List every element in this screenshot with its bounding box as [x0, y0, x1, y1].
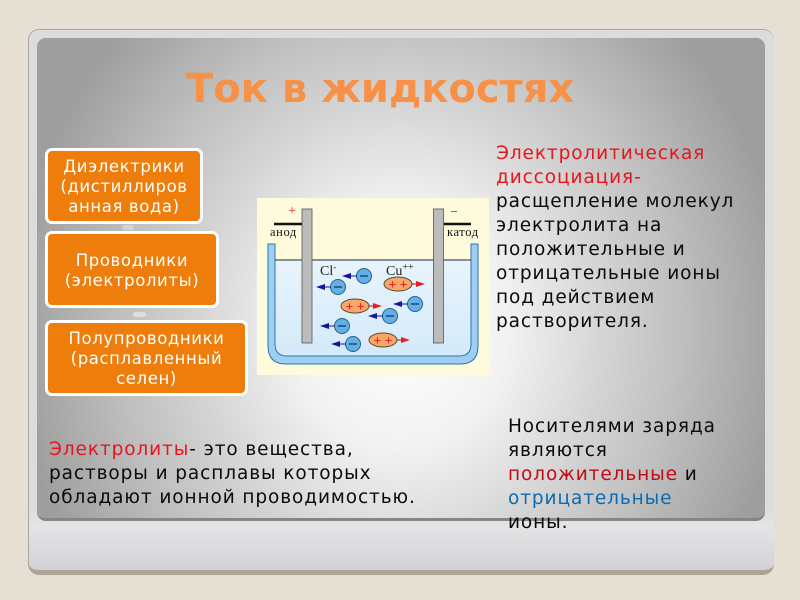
electrolysis diagram: анод [270, 225, 297, 239]
text: dissociation definition: расщепление молекул [496, 191, 734, 212]
box: conductors [45, 231, 219, 308]
box: dielectrics [45, 148, 203, 224]
electrolysis diagram [257, 198, 489, 375]
text: dissociation definition: Электролитическая [496, 143, 705, 164]
electrolysis diagram: + + [346, 298, 364, 314]
text: electrolytes definition [49, 439, 416, 508]
electrodes [302, 209, 312, 343]
text: charge carriers: положительные и [508, 464, 698, 485]
text: electrolytes definition: растворы и расплавы которых [49, 463, 371, 484]
positive ions [341, 277, 412, 347]
connector: second arrow [133, 312, 146, 317]
box: semiconductors: (расплавленный [71, 349, 222, 368]
electrolysis diagram: + + [374, 332, 392, 348]
text: dissociation definition: диссоциация- [496, 167, 642, 188]
electrolysis diagram: катод [447, 225, 479, 239]
title: Ток в жидкостях [186, 66, 574, 112]
box: dielectrics: (дистиллиров [60, 177, 188, 196]
text: charge carriers: Носителями заряда [508, 416, 716, 437]
text: electrolytes definition: обладают ионной проводимостью. [49, 487, 416, 508]
box: semiconductors: селен) [116, 369, 177, 388]
text: charge carriers: являются [508, 440, 608, 461]
text: dissociation definition: положительные и [496, 239, 686, 260]
electrolysis diagram: Cu [386, 264, 402, 279]
box: dielectrics: Диэлектрики [63, 157, 185, 176]
connector: first arrow [122, 225, 134, 230]
text: dissociation definition [496, 143, 734, 332]
text: dissociation definition: электролита на [496, 215, 662, 236]
electrolysis diagram: + [288, 204, 296, 219]
box: semiconductors: Полупроводники [68, 329, 224, 348]
text: charge carriers [508, 416, 716, 533]
main gradient panel [37, 38, 765, 521]
electrolysis diagram: - [333, 262, 336, 272]
text: charge carriers: отрицательные [508, 488, 672, 509]
electrolysis diagram: ++ [402, 262, 414, 273]
text: dissociation definition: растворителя. [496, 311, 649, 332]
water [275, 260, 471, 356]
box: conductors: (электролиты) [65, 270, 199, 290]
tank [268, 244, 478, 364]
box: semiconductors [45, 320, 248, 396]
box: conductors: Проводники [76, 250, 188, 270]
text: charge carriers: ионы. [508, 512, 568, 533]
text: dissociation definition: отрицательные ионы [496, 263, 721, 284]
box: dielectrics: анная вода) [68, 197, 180, 216]
text: dissociation definition: под действием [496, 287, 655, 308]
text: electrolytes definition: Электролиты- это вещества, [49, 439, 354, 460]
negative ions [330, 268, 422, 352]
electrolysis diagram: + + [389, 276, 407, 292]
electrolysis diagram: – [450, 203, 458, 217]
electrolysis diagram: Cl [320, 264, 333, 279]
